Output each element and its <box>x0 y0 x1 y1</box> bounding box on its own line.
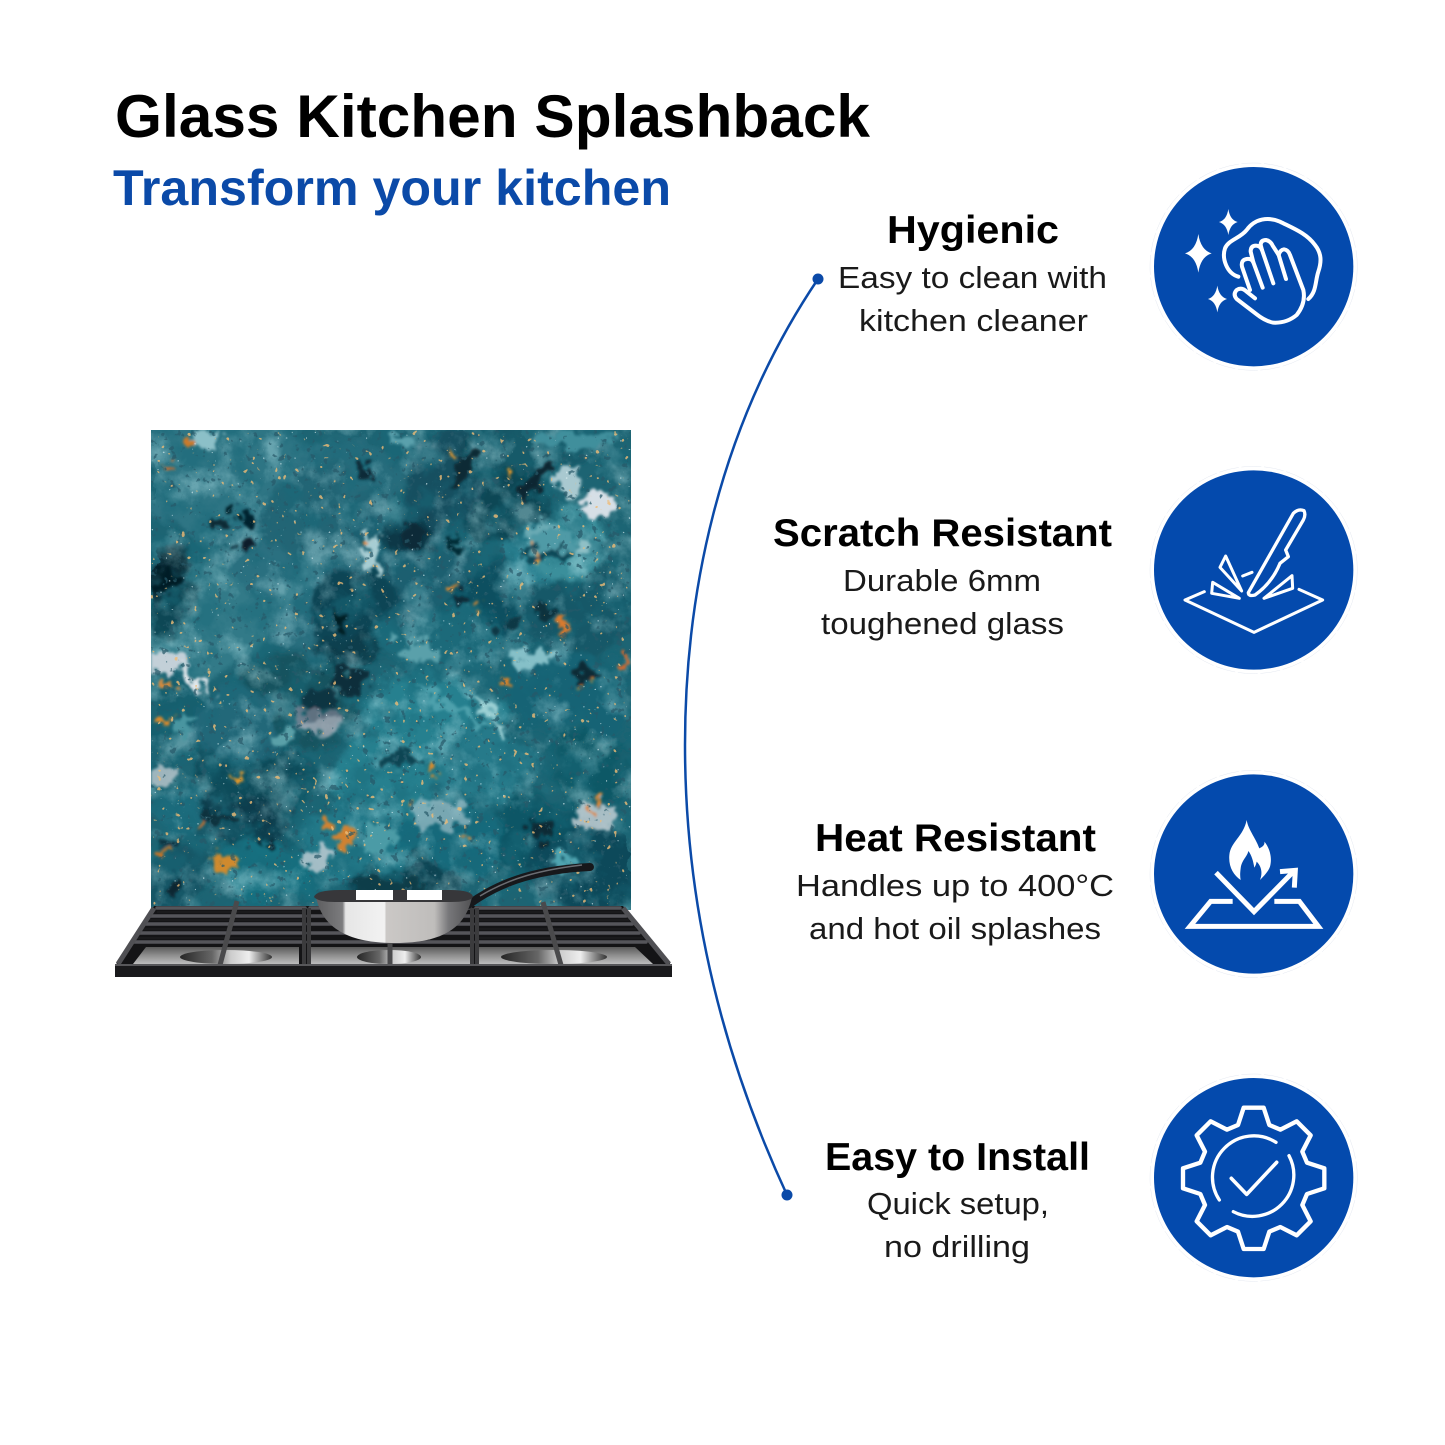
gas hob <box>115 901 672 977</box>
heading: Hygienic <box>887 209 1059 252</box>
pan handle <box>468 867 590 905</box>
description: Durable 6mm <box>843 563 1041 598</box>
icon: gear with check mark <box>1150 1074 1357 1281</box>
orange patches <box>180 437 196 447</box>
marble glass panel <box>130 420 640 915</box>
side rails <box>118 908 669 964</box>
steel surfaces <box>133 947 299 964</box>
dark veins <box>224 505 240 515</box>
pale flecks <box>362 529 382 575</box>
description: Handles up to 400°C <box>796 868 1114 903</box>
title: Glass Kitchen Splashback <box>115 83 871 150</box>
feature: heat resistant <box>796 817 1114 946</box>
icon: knife scratching glass <box>1150 466 1357 674</box>
description <box>838 260 1107 338</box>
description: Quick setup, <box>867 1186 1049 1221</box>
front edge <box>115 965 672 977</box>
description: no drilling <box>884 1229 1030 1264</box>
description <box>821 563 1064 641</box>
icon: flame over heated surface <box>1150 770 1357 978</box>
description <box>867 1186 1049 1264</box>
description <box>796 868 1114 946</box>
vertical pan supports <box>220 901 561 965</box>
pan bowl <box>316 897 472 943</box>
description: kitchen cleaner <box>859 303 1088 338</box>
subtitle: Transform your kitchen <box>113 160 671 216</box>
description: Easy to clean with <box>838 260 1107 295</box>
description: toughened glass <box>821 606 1064 641</box>
description: and hot oil splashes <box>809 911 1101 946</box>
heading: Heat Resistant <box>815 817 1096 860</box>
burners <box>180 950 272 964</box>
connector curve with end dots <box>685 274 824 1200</box>
feature: scratch resistant <box>773 512 1112 641</box>
feature: hygienic <box>838 209 1107 338</box>
frying pan <box>314 865 590 943</box>
icon: hand wiping with sparkles <box>1150 163 1357 370</box>
pan rim <box>314 890 473 902</box>
product image: glass splashback above gas hob <box>115 420 672 977</box>
feature: easy to install <box>825 1136 1090 1264</box>
heading: Easy to Install <box>825 1136 1090 1179</box>
heading: Scratch Resistant <box>773 512 1112 555</box>
